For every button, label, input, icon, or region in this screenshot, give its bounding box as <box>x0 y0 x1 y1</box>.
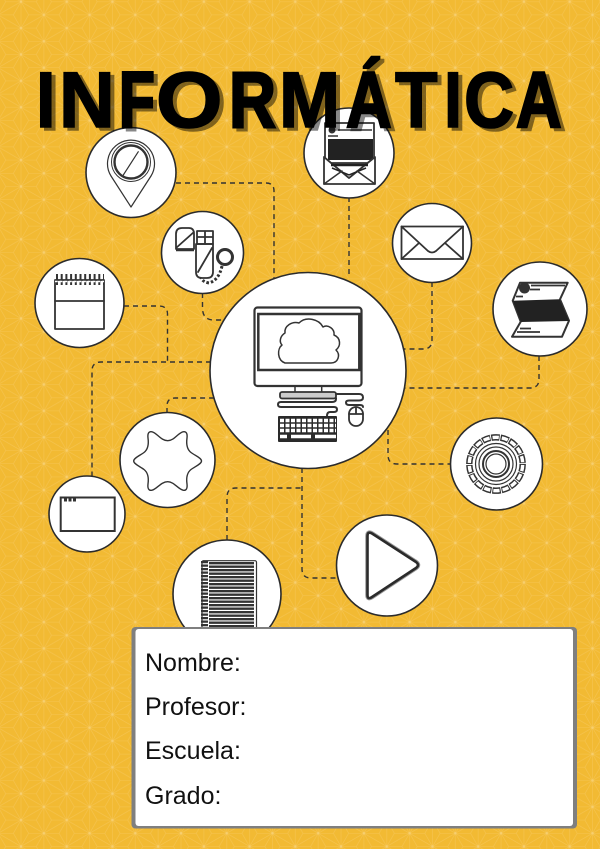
title: M <box>278 55 340 144</box>
icon: desktop computer with cloud <box>210 272 406 468</box>
icon: browser window and envelope <box>304 108 394 198</box>
icon: folder window <box>49 476 125 552</box>
field: profesor: Profesor: <box>145 693 246 721</box>
mouse <box>349 407 363 426</box>
title <box>36 55 566 144</box>
title: C <box>464 55 515 144</box>
keyboard <box>278 416 337 442</box>
field: escuela: Escuela: <box>145 737 241 765</box>
icon: spiral notebook <box>173 540 281 648</box>
icon: gear <box>450 418 542 510</box>
icon: map pin <box>86 128 176 218</box>
icon: six pointed star <box>120 412 215 508</box>
title: N <box>59 55 115 144</box>
icon: spiral calendar <box>35 258 124 348</box>
field: grado: Grado: <box>145 782 221 810</box>
title: T <box>395 55 438 144</box>
icon: usb drive <box>162 212 244 294</box>
dashed connector lines <box>92 183 539 578</box>
title: F <box>119 55 155 144</box>
title: R <box>229 55 276 144</box>
icon: play button <box>336 515 438 616</box>
icon: envelope <box>392 204 472 282</box>
title: O <box>156 55 223 144</box>
icon: open laptop page <box>493 262 587 356</box>
title: I <box>36 55 56 144</box>
cloud <box>279 319 340 363</box>
title: A <box>516 55 561 144</box>
title: I <box>444 55 462 144</box>
monitor base and cables <box>278 392 363 416</box>
student info card <box>132 627 577 828</box>
field: nombre: Nombre: <box>145 649 241 677</box>
title: Á <box>346 55 391 144</box>
monitor <box>254 308 362 393</box>
